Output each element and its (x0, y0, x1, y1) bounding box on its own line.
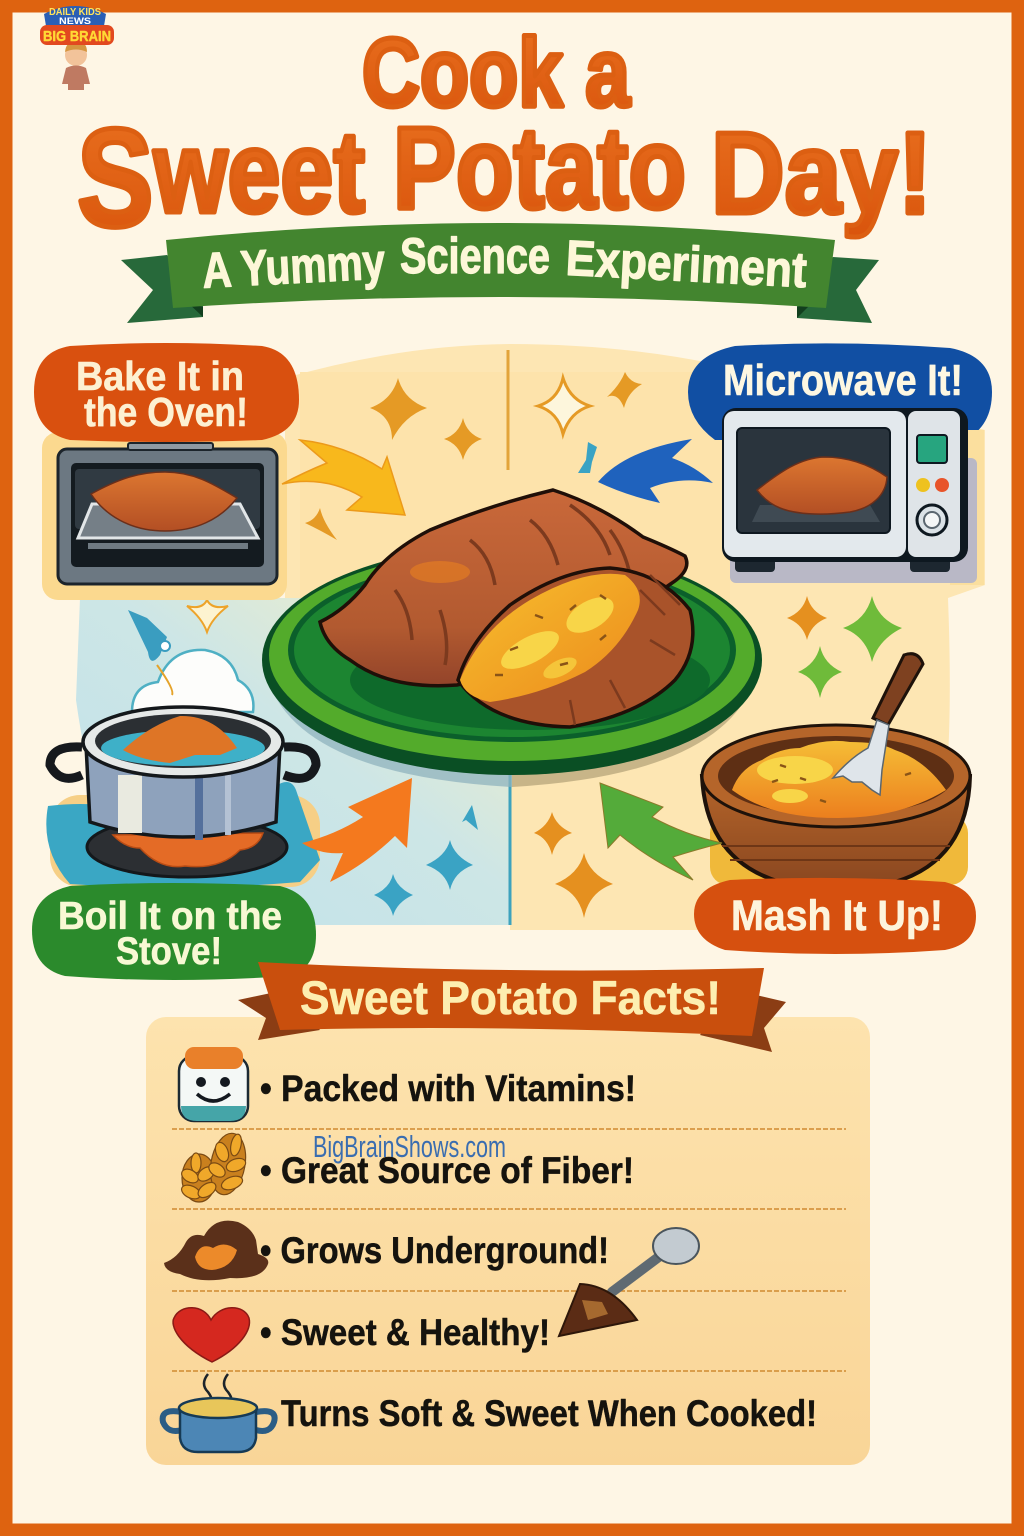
icon: soil mound with potato (164, 1221, 268, 1280)
logo: Daily Kids News Big Brain: DAILY KIDS (49, 7, 101, 18)
title: Cook a (362, 18, 631, 127)
label: Mash It Up (694, 878, 976, 954)
arrow: blue from microwave (598, 439, 713, 503)
label: Bake It in the Oven (34, 343, 299, 442)
subtitle ribbon: A Yummy (201, 233, 387, 299)
sparkles (187, 372, 902, 918)
facts banner: Sweet Potato Facts! (300, 971, 721, 1024)
panel: sweet potato facts (146, 962, 870, 1465)
icon: wheat (179, 1131, 250, 1202)
icon: trowel (559, 1228, 699, 1336)
facts banner (238, 962, 786, 1052)
label: Bake It in the Oven: Bake It in (76, 353, 244, 399)
logo: Daily Kids News Big Brain: NEWS (59, 16, 91, 26)
label: Boil It on the Stove: Stove! (116, 930, 222, 973)
fact 1: • Packed with Vitamins! (260, 1068, 636, 1109)
icon: oven with sweet potato (58, 443, 277, 584)
arrow: orange from pot (302, 778, 412, 882)
icon: vitamin jar (179, 1047, 248, 1121)
logo: Daily Kids News Big Brain (40, 6, 114, 90)
title: S (77, 99, 154, 256)
fact 2: • Great Source of Fiber! (260, 1150, 634, 1191)
subtitle ribbon: Experiment (565, 230, 808, 298)
label: Boil It on the Stove (32, 883, 316, 980)
logo: Daily Kids News Big Brain: BIG BRAIN (43, 28, 111, 45)
arrow: green from bowl (600, 783, 722, 880)
arrow: yellow from oven (282, 440, 405, 515)
icon: boiling pot on stove (46, 610, 320, 888)
icon: cooking pot with steam (163, 1374, 275, 1452)
central plate with sweet potatoes (262, 490, 762, 787)
fact 4: • Sweet & Healthy! (260, 1312, 550, 1353)
icon: bowl of mashed sweet potato with fork (702, 654, 970, 886)
fact 5: Turns Soft & Sweet When Cooked! (281, 1393, 817, 1434)
icon: microwave with sweet potato (722, 408, 984, 585)
title: Potato (393, 103, 686, 233)
title (77, 18, 932, 256)
icon: heart (173, 1308, 249, 1362)
label: Boil It on the Stove: Boil It on the (58, 895, 282, 938)
label: Bake It in the Oven: the Oven! (84, 389, 248, 435)
watermark: BigBrainShows.com (313, 1129, 506, 1164)
central activity background (76, 344, 985, 930)
subtitle ribbon (121, 223, 879, 323)
title: Day! (711, 108, 932, 238)
fact 3: • Grows Underground! (260, 1230, 609, 1271)
title: weet (153, 107, 365, 237)
label: Mash It Up: Mash It Up! (731, 892, 943, 940)
label: Microwave It (688, 343, 992, 440)
oven backing panel (42, 432, 287, 600)
label: Microwave It: Microwave It! (723, 356, 963, 405)
subtitle ribbon: Science (400, 228, 550, 284)
